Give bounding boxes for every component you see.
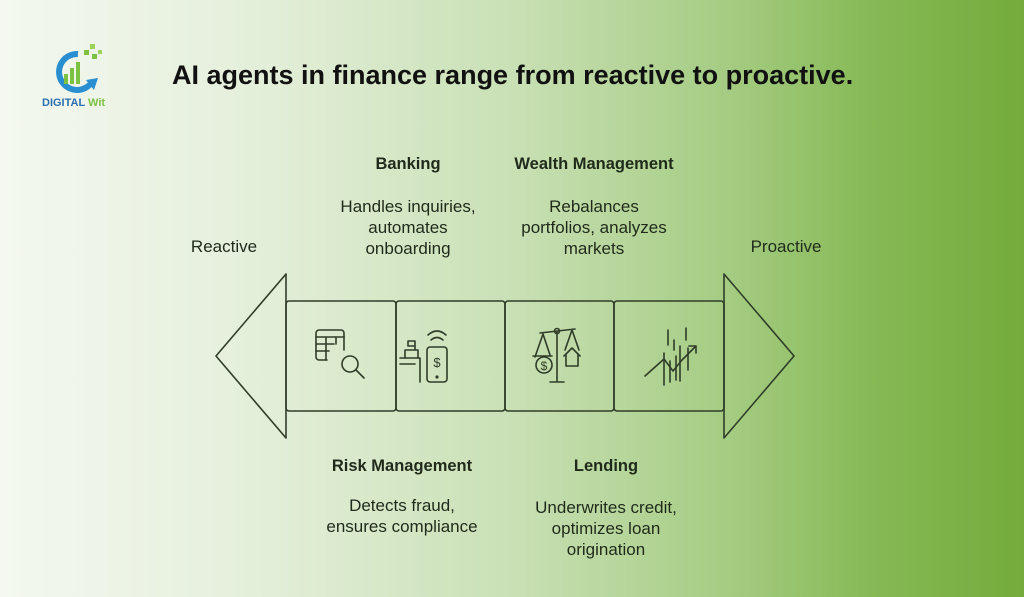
block: Lending: origination [567,540,645,559]
block: Wealth Management: portfolios, analyzes [521,218,667,237]
block: Wealth Management: Wealth Management [514,155,674,173]
icon: scale with money and house: $ [541,359,548,373]
block: Risk Management: Detects fraud, [349,496,455,515]
icon: register and phone: $ [433,355,441,370]
block: Lending: Underwrites credit, [535,498,677,517]
block: Banking: onboarding [365,239,451,258]
block: Risk Management: ensures compliance [326,517,478,536]
icon: growth chart [645,328,696,385]
block: Lending: optimizes loan [552,519,660,538]
block: Lending: Lending [574,457,638,475]
block: Wealth Management [514,155,674,258]
right arrowhead [724,274,794,438]
block: Banking [340,155,476,258]
block: Risk Management: Risk Management [332,457,472,475]
logo [42,44,105,109]
block: Wealth Management: markets [564,239,624,258]
block: Lending [535,457,677,559]
icon: table with magnifier [316,330,364,378]
boxes [286,301,724,411]
block: Risk Management [326,457,478,536]
block: Wealth Management: Rebalances [549,197,639,216]
block: Banking: Banking [375,155,441,173]
logo: DIGITAL Wit [42,97,105,109]
block: Banking: Handles inquiries, [340,197,476,216]
icon: register and phone [400,331,447,382]
block: Banking: automates [368,218,448,237]
label: Proactive: Proactive [751,237,821,256]
title: AI agents in finance range from reactive to proactive. [172,60,853,90]
label: Reactive: Reactive [191,237,257,256]
left arrowhead [216,274,286,438]
icon: scale with money and house [533,328,580,382]
